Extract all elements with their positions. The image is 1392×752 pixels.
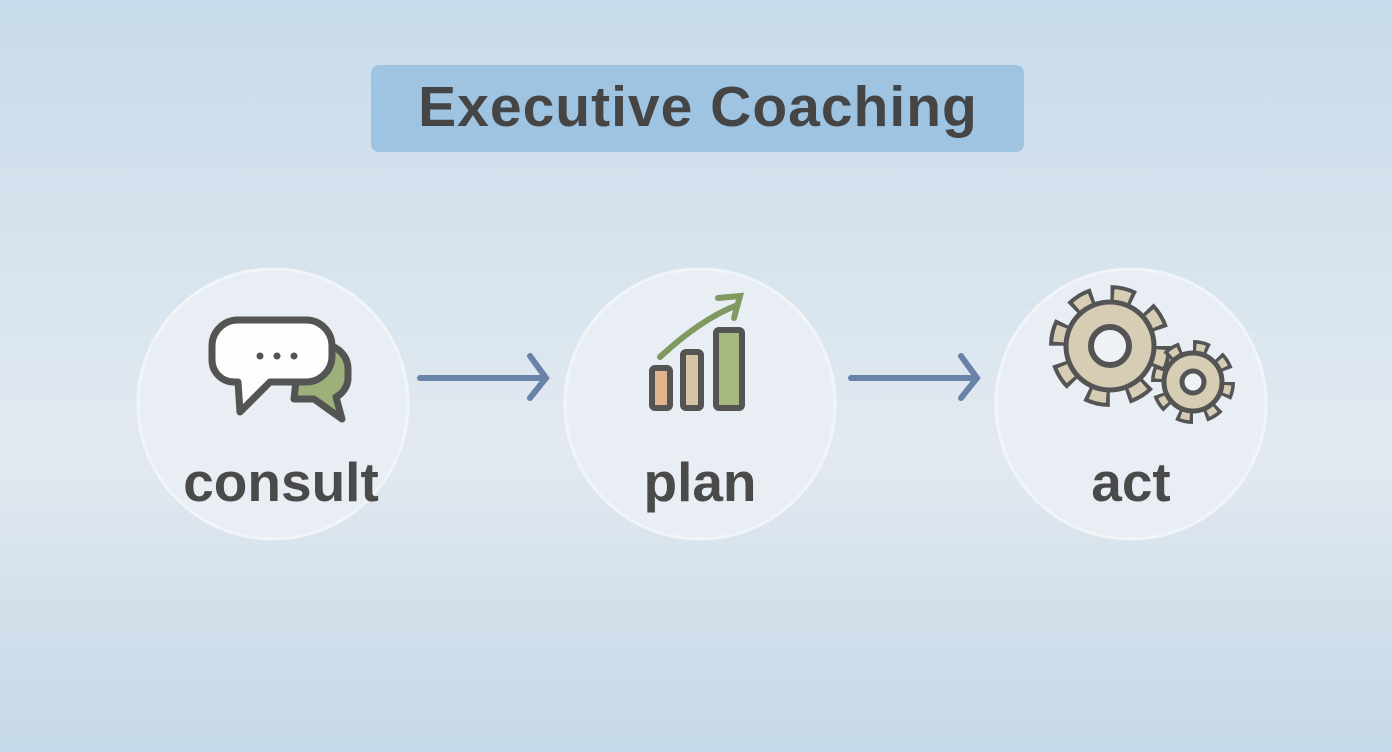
title <box>371 65 1024 152</box>
arrow 2 <box>851 356 977 398</box>
step: plan <box>565 269 835 539</box>
icon: speech bubbles <box>212 320 348 419</box>
step: plan: plan <box>643 451 757 513</box>
step: consult <box>138 269 408 539</box>
step: consult: consult <box>183 451 379 513</box>
step: act: act <box>1091 451 1171 513</box>
icon: gears <box>1061 297 1225 414</box>
step: act <box>996 269 1266 539</box>
arrow 1 <box>420 356 546 398</box>
icon: bar chart <box>652 296 742 408</box>
title: Executive Coaching <box>418 75 978 139</box>
